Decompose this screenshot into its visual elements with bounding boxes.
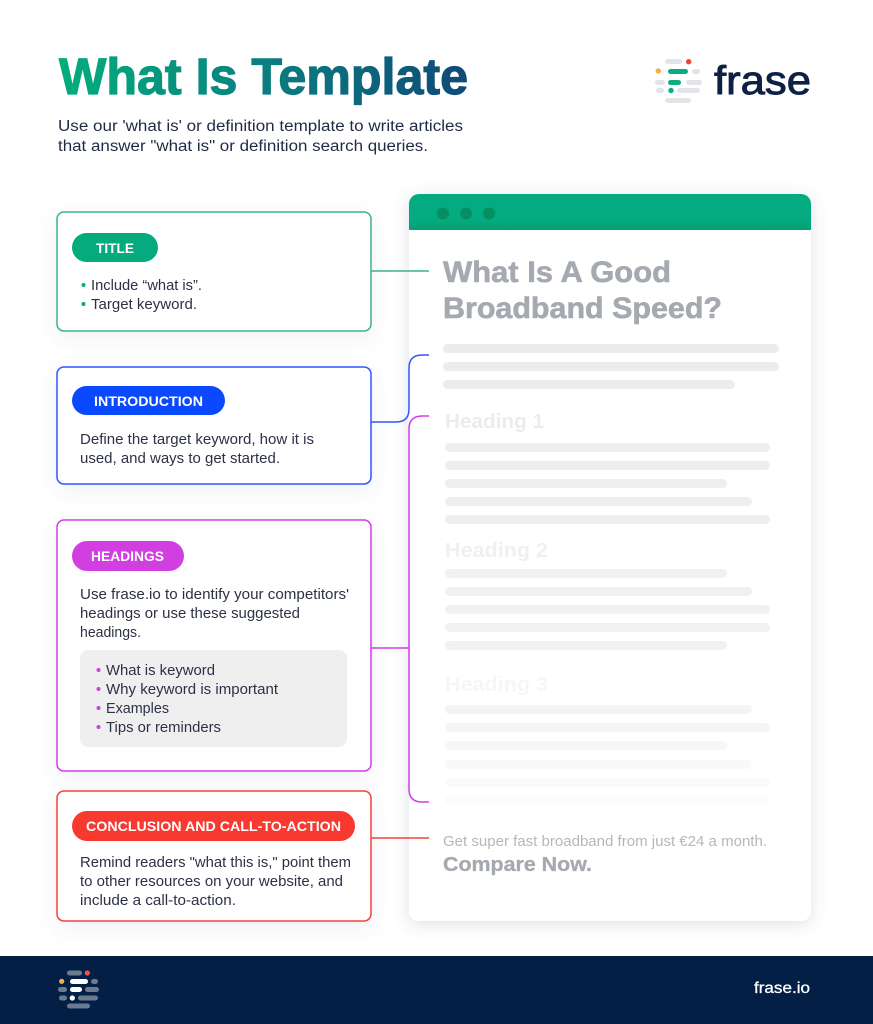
subtitle — [58, 118, 463, 155]
text: conclusion: include a call-to-action. — [80, 893, 236, 909]
panel: conclusion — [57, 791, 371, 921]
connector: title — [371, 270, 429, 272]
bullets: title — [82, 278, 202, 313]
panel: title — [57, 212, 371, 331]
footer logo — [58, 970, 99, 1008]
article title: Broadband Speed? — [443, 292, 722, 325]
browser title bar — [409, 194, 811, 230]
footer — [0, 956, 873, 1024]
heading 1: Heading 1 — [445, 411, 544, 433]
pill: title — [72, 233, 158, 262]
call to action — [443, 834, 767, 876]
connector: conclusion — [371, 837, 429, 839]
heading 1 lines — [445, 443, 770, 524]
heading 2: Heading 2 — [445, 540, 548, 562]
text: headings: headings. — [80, 625, 141, 641]
article title — [443, 256, 722, 325]
text: conclusion — [80, 855, 351, 909]
introduction lines — [443, 344, 779, 389]
suggested headings list: What is keyword — [106, 663, 215, 679]
title: What Is Template — [59, 48, 468, 105]
panel: headings — [57, 520, 371, 771]
heading 3: Heading 3 — [445, 674, 548, 696]
suggested headings list: Tips or reminders — [106, 720, 221, 736]
logo: frase — [655, 59, 811, 103]
suggested headings list — [80, 650, 347, 747]
panel: introduction — [57, 367, 371, 484]
pill: headings: HEADINGS — [91, 549, 164, 564]
suggested headings list: Examples — [106, 701, 169, 717]
connector: introduction — [371, 355, 429, 422]
text: headings: headings or use these suggested — [80, 606, 300, 622]
heading 3 lines — [445, 705, 770, 804]
browser window body — [409, 194, 811, 921]
call to action: Get super fast broadband from just €24 a month. — [443, 834, 767, 850]
heading 2 lines — [445, 569, 770, 650]
pill: conclusion: CONCLUSION AND CALL-TO-ACTION — [86, 819, 341, 834]
bullets: title: Target keyword. — [91, 297, 197, 313]
subtitle: that answer "what is" or definition search queries. — [58, 138, 428, 155]
subtitle: Use our 'what is' or definition template to write articles — [58, 118, 463, 135]
suggested headings list: Why keyword is important — [106, 682, 278, 698]
text: conclusion: Remind readers "what this is," point them — [80, 855, 351, 871]
connector: headings — [371, 416, 429, 802]
bullets: title: Include “what is”. — [91, 278, 202, 294]
call to action: Compare Now. — [443, 854, 592, 876]
pill: conclusion — [72, 811, 355, 841]
text: headings: Use frase.io to identify your competitors' — [80, 587, 349, 603]
text: conclusion: to other resources on your website, and — [80, 874, 343, 890]
pill: introduction — [72, 386, 225, 415]
text: introduction — [80, 432, 314, 467]
text: introduction: Define the target keyword, how it is — [80, 432, 314, 448]
text: introduction: used, and ways to get started. — [80, 451, 280, 467]
pill: introduction: INTRODUCTION — [94, 394, 203, 409]
panel: browser mockup — [409, 194, 811, 921]
pill: headings — [72, 541, 184, 571]
logo: frase: frase — [714, 59, 811, 103]
pill: title: TITLE — [96, 241, 134, 256]
text: headings — [80, 587, 349, 641]
footer url: frase.io — [754, 980, 810, 997]
article title: What Is A Good — [443, 256, 671, 289]
